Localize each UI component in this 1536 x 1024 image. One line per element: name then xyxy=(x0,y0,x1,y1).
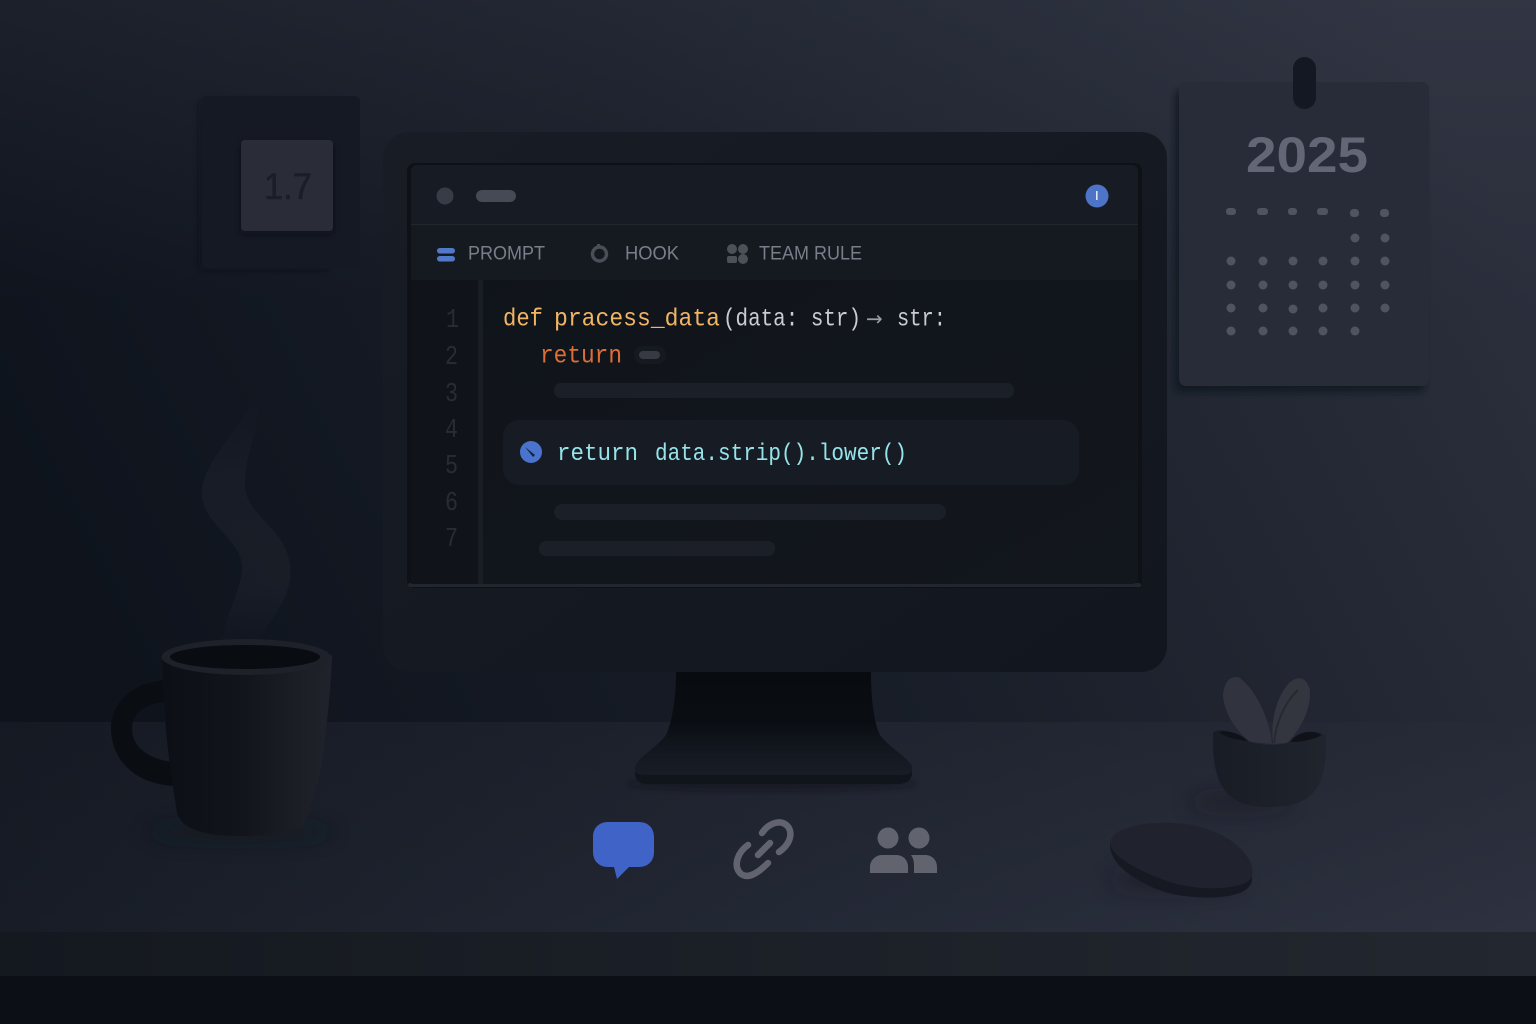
suggestion icon xyxy=(520,441,542,463)
code line 1: pracess_data xyxy=(554,304,720,334)
tab: hook xyxy=(592,244,679,264)
desk front edge xyxy=(0,932,1536,976)
suggestion row: data.strip().lower() xyxy=(655,441,907,468)
desk surface xyxy=(0,722,1536,932)
mouse xyxy=(1107,823,1252,898)
steam xyxy=(202,395,290,647)
placeholder line 3 xyxy=(554,383,1014,398)
tab: hook: HOOK xyxy=(625,244,679,264)
line number gutter xyxy=(411,280,483,584)
wall background xyxy=(0,0,1536,722)
line number gutter: 4 xyxy=(445,416,458,446)
leaves xyxy=(1223,677,1310,744)
calendar clip xyxy=(1293,57,1316,109)
code line 1: str: xyxy=(897,304,946,334)
status dot xyxy=(1086,184,1108,208)
code line 2: return xyxy=(540,342,622,370)
line number gutter: 5 xyxy=(445,452,458,482)
screen xyxy=(407,163,1142,588)
placeholder line 6 xyxy=(554,504,946,520)
tab: prompt: PROMPT xyxy=(468,244,545,264)
pot xyxy=(1213,730,1326,807)
icon: link xyxy=(737,822,790,876)
version number: 1.7 xyxy=(264,166,312,207)
mug handle xyxy=(111,680,178,786)
code line 1: def xyxy=(503,304,543,334)
tab: prompt xyxy=(437,244,545,264)
code line 1: → xyxy=(866,306,883,330)
line number gutter: 6 xyxy=(445,489,458,519)
line number gutter: 2 xyxy=(445,343,458,373)
calendar xyxy=(1175,57,1429,392)
placeholder line 7 xyxy=(539,541,775,556)
line number gutter: 1 xyxy=(446,306,459,336)
floor strip xyxy=(0,976,1536,1024)
tab bar xyxy=(411,225,1138,280)
suggestion row xyxy=(503,420,1079,485)
suggestion row: return xyxy=(557,441,638,468)
coffee mug xyxy=(111,639,335,842)
tab: team rule: TEAM RULE xyxy=(759,244,862,264)
line number gutter: 7 xyxy=(445,525,458,555)
calendar dots xyxy=(1226,208,1390,336)
title bar xyxy=(411,165,1138,225)
monitor stand xyxy=(627,670,917,791)
code line 1: (data: str) xyxy=(723,304,861,334)
monitor xyxy=(383,132,1167,672)
plant xyxy=(1188,677,1326,810)
wall plaque with version tile xyxy=(199,96,360,270)
icon: speech bubble xyxy=(593,822,654,879)
line number gutter: 3 xyxy=(445,380,458,410)
calendar year: 2025 xyxy=(1246,127,1368,183)
icon: team xyxy=(870,828,937,873)
version tile xyxy=(241,140,333,231)
